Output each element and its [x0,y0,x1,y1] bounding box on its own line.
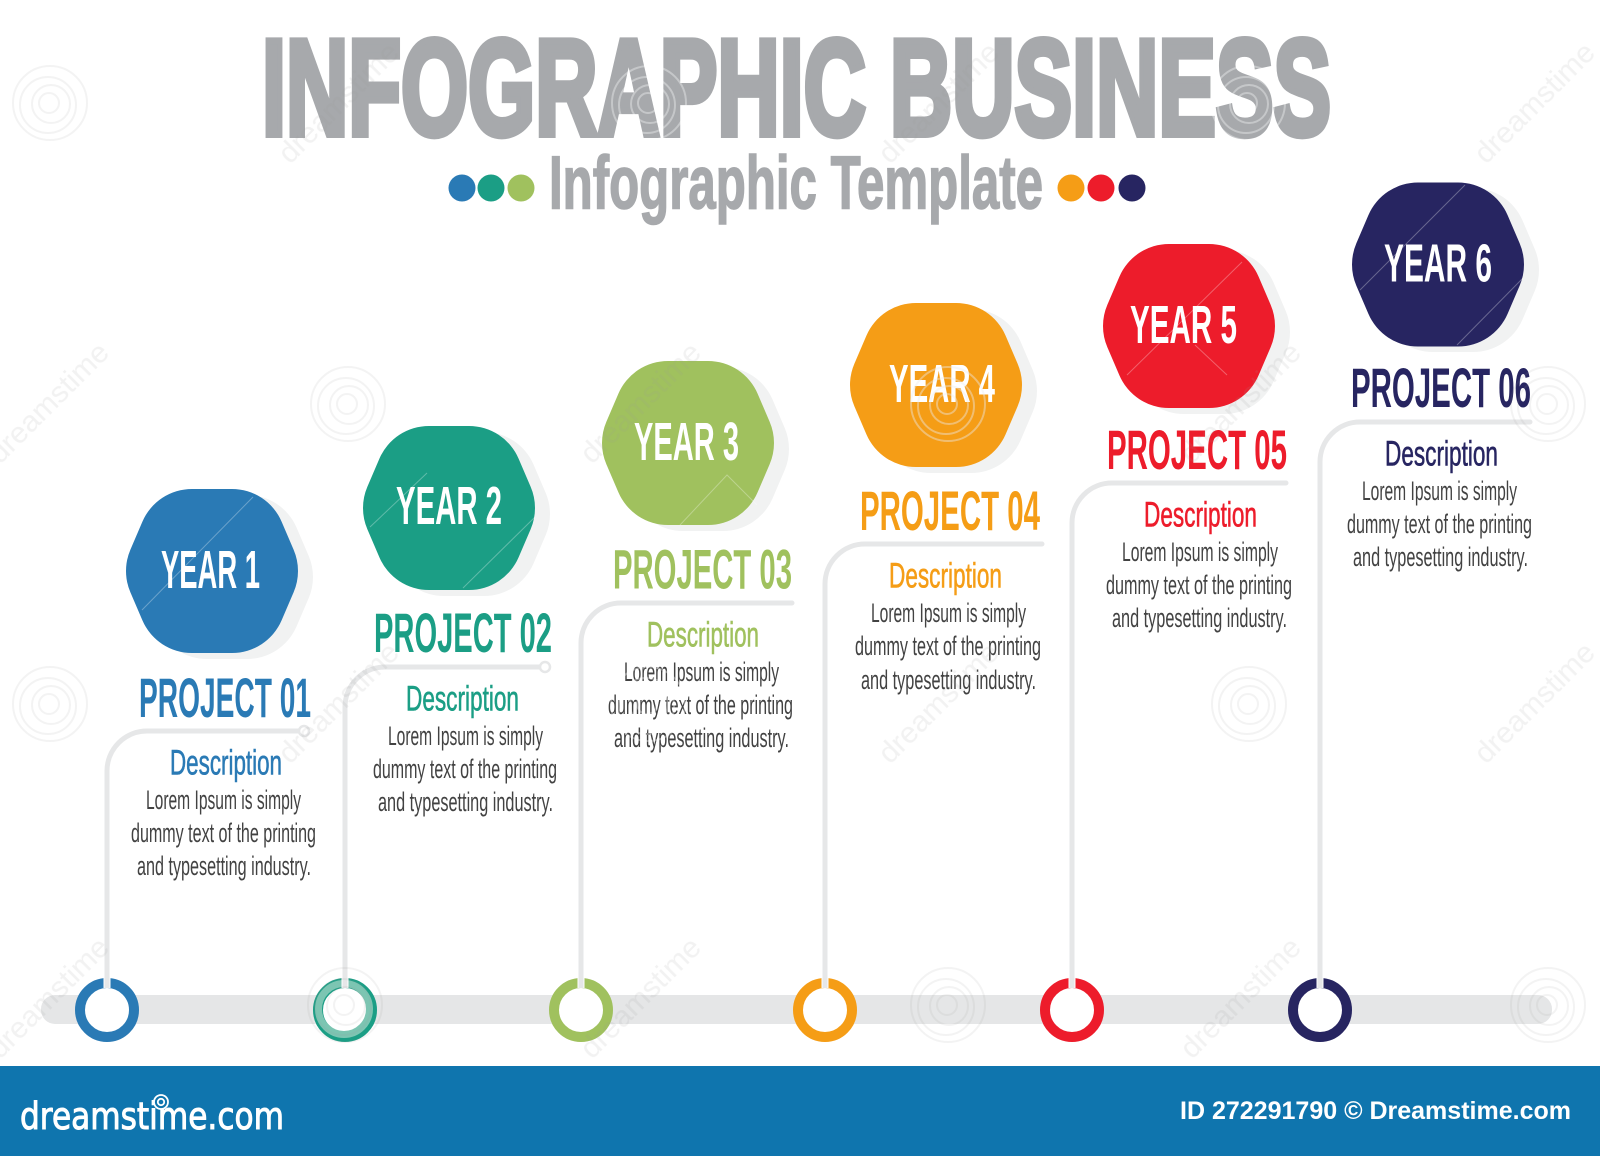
body text 1: dummy text of the printing [131,818,316,848]
timeline markers [80,983,1347,1037]
dots: right group [1058,174,1146,202]
description 4: Description [889,556,1002,596]
panel: project 03 [581,412,793,988]
project 03 heading: PROJECT 03 [613,538,792,600]
connector 1 [107,731,304,988]
year 3 label: YEAR 3 [634,412,739,472]
watermark text: dreamstime [1174,931,1308,1065]
hexagon shadow 5 [1172,304,1236,360]
connector 6 [1320,422,1530,988]
icon: spiral [154,1095,168,1109]
year 2 label: YEAR 2 [396,476,502,536]
watermark text: dreamstime [574,931,708,1065]
hexagon 6 [1406,236,1470,292]
body text 1: and typesetting industry. [137,851,311,881]
description 2: Description [406,680,519,718]
footer id text: ID 272291790 © Dreamstime.com [1180,1097,1571,1125]
body text 6 [1347,476,1532,572]
hexagon 4 [904,357,968,413]
marker 2 [318,983,372,1037]
dots: left group [448,174,534,202]
description 6: Description [1385,434,1498,474]
body text 2 [373,721,557,817]
watermark lines on hexagons [142,185,1523,610]
body text 5: and typesetting industry. [1112,603,1287,633]
hexagon 1 [180,543,244,599]
year 5 label: YEAR 5 [1130,295,1237,355]
project 04 heading: PROJECT 04 [860,479,1040,542]
body text 5: Lorem Ipsum is simply [1122,537,1278,567]
watermark text: dreamstime [1468,636,1600,770]
hexagon shadow 3 [671,421,735,477]
body text 2: and typesetting industry. [378,787,553,817]
body text 2: dummy text of the printing [373,754,557,784]
marker 4 [798,983,852,1037]
watermark text: dreamstime [272,636,406,770]
watermark spirals on title [611,66,1285,741]
description 5: Description [1144,496,1257,534]
body text 3: Lorem Ipsum is simply [624,657,779,687]
project 05 heading: PROJECT 05 [1107,418,1287,481]
year 1 label: YEAR 1 [161,540,260,600]
hexagon shadow 6 [1421,242,1485,298]
footer logo: dreamstime.com [20,1095,284,1138]
body text 1 [131,785,316,881]
connector end 1 [299,726,309,736]
connector 5 [1072,483,1286,988]
panel: project 01 [107,540,316,988]
connector 3 [581,603,792,988]
timeline bar [41,995,1552,1024]
body text 4: dummy text of the printing [855,631,1041,661]
project 02 heading: PROJECT 02 [374,601,552,664]
hexagon 2 [417,480,481,536]
body text 3: and typesetting industry. [614,723,789,753]
watermark text: dreamstime [272,36,406,170]
year 6 label: YEAR 6 [1384,234,1492,294]
body text 5: dummy text of the printing [1106,570,1292,600]
marker 5 [1045,983,1099,1037]
hexagon shadow 1 [195,549,259,605]
connector end 2 [540,662,550,672]
body text 4 [855,598,1041,695]
watermark text: dreamstime [872,636,1006,770]
panel: project 04 [825,354,1042,988]
watermark text: dreamstime [1468,36,1600,170]
marker stems [107,960,1320,988]
marker 1 [80,983,134,1037]
marker 3 [554,983,608,1037]
project 01 heading: PROJECT 01 [139,666,311,729]
body text 4: Lorem Ipsum is simply [871,598,1026,628]
watermark text: dreamstime [1174,336,1308,470]
body text 4: and typesetting industry. [861,665,1036,695]
hexagon shadow 4 [919,363,983,419]
marker 6 [1293,983,1347,1037]
marker 2 watermark tint [318,984,370,1034]
body text 3 [608,657,793,753]
subtitle: Infographic Template [549,140,1043,224]
body text 3: dummy text of the printing [608,690,793,720]
panel: project 06 [1320,234,1532,988]
hexagon 5 [1157,298,1221,354]
panel: project 02 [345,476,557,988]
hexagon 3 [656,415,720,471]
body text 5 [1106,537,1292,633]
watermark text: dreamstime [872,36,1006,170]
body text 2: Lorem Ipsum is simply [388,721,543,751]
description 3: Description [647,616,759,654]
body text 1: Lorem Ipsum is simply [146,785,301,815]
panel: project 05 [1072,295,1292,988]
description 1: Description [170,744,282,782]
hexagon shadow 2 [432,486,496,542]
connector 4 [825,544,1042,988]
footer bar [0,1066,1600,1156]
year 4 label: YEAR 4 [889,354,995,414]
watermark text: dreamstime [574,336,708,470]
connector 2 [345,667,545,988]
